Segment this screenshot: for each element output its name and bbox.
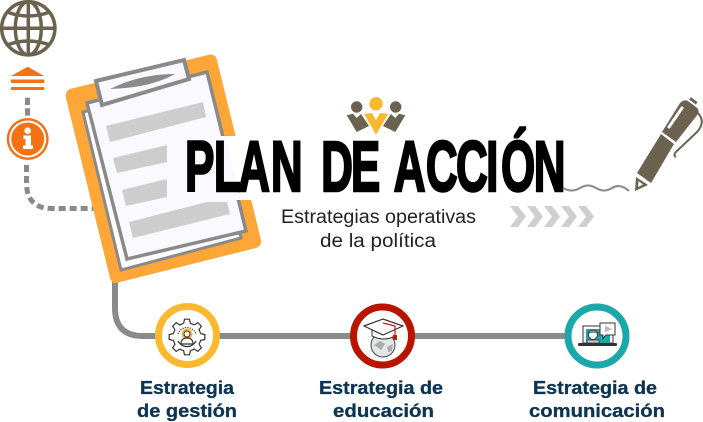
icon: graduation cap and globe xyxy=(364,319,403,357)
subtitle xyxy=(281,207,476,252)
text bars xyxy=(106,102,230,238)
connector: dashed line from arrow to info icon xyxy=(25,98,30,116)
clip xyxy=(96,60,189,105)
subtitle: de la política xyxy=(320,231,436,252)
icon: laptop with video bubble xyxy=(578,323,617,346)
label: educación xyxy=(333,401,434,421)
icon: three people xyxy=(347,97,405,135)
title backdrop xyxy=(185,136,565,200)
back sheet xyxy=(83,82,241,270)
label xyxy=(137,378,237,421)
icon: up arrow with bars xyxy=(11,67,44,90)
label: comunicación xyxy=(529,401,665,421)
node: estrategia de comunicación xyxy=(529,307,665,421)
subtitle: Estrategias operativas xyxy=(281,207,476,228)
label: Estrategia xyxy=(140,378,235,398)
front sheet xyxy=(87,72,246,259)
label: Estrategia de xyxy=(319,378,443,398)
label xyxy=(319,378,443,421)
label: Estrategia de xyxy=(533,378,657,398)
icon: pen xyxy=(635,98,702,191)
icon: gear with person xyxy=(169,319,205,355)
clipboard board xyxy=(66,55,261,283)
connector: dashed line from info icon to clipboard xyxy=(26,165,100,208)
connector: timeline line xyxy=(115,280,600,336)
clipboard xyxy=(66,55,261,283)
label xyxy=(529,378,665,421)
chevrons xyxy=(510,206,594,227)
patch of sheet behind title xyxy=(185,136,241,200)
icon: globe xyxy=(2,2,55,55)
icon: information badge xyxy=(7,118,49,160)
signature squiggle xyxy=(563,186,629,191)
node: estrategia de educación xyxy=(319,307,443,421)
node: estrategia de gestión xyxy=(137,306,237,421)
title: PLAN DE ACCIÓN xyxy=(185,127,566,207)
label: de gestión xyxy=(137,401,237,421)
